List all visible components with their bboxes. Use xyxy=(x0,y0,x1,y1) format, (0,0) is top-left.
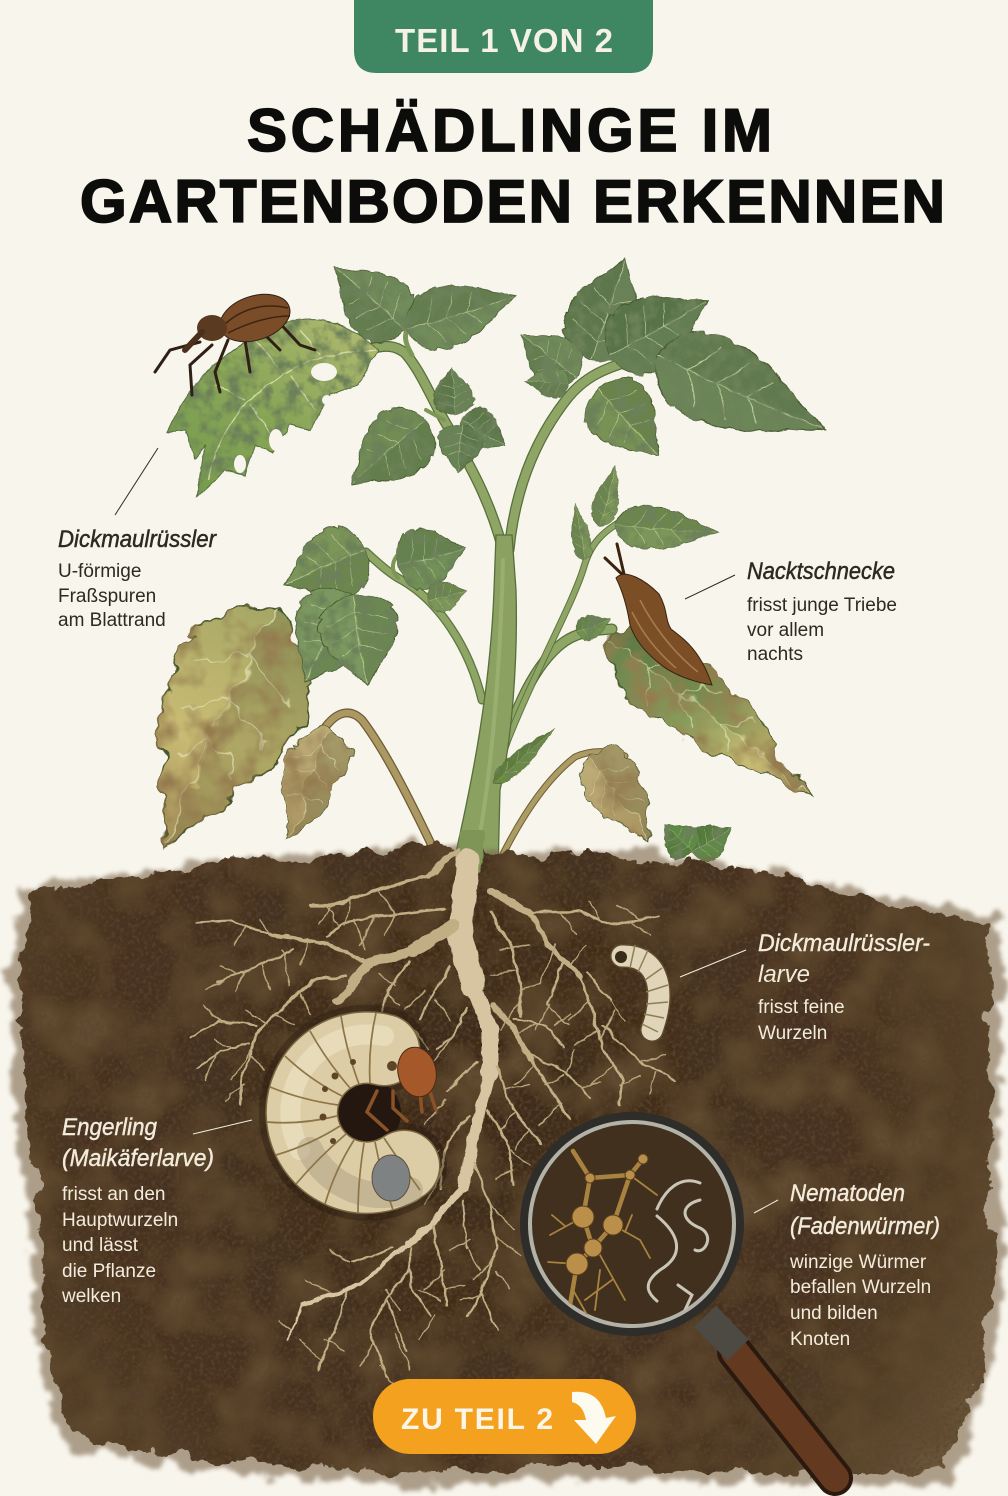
label: Dickmaulrüssler: Fraßspuren xyxy=(58,586,156,607)
icon: curved arrow xyxy=(572,1392,616,1444)
label: Dickmaulrüsslerlarve xyxy=(680,930,930,1044)
header tab xyxy=(354,0,653,73)
label: Nematoden: winzige Würmer xyxy=(789,1252,927,1273)
header tab: TEIL 1 VON 2 xyxy=(395,22,613,59)
label: Engerling: frisst an den xyxy=(62,1184,166,1205)
icon: weevil beetle xyxy=(155,286,315,395)
label: Engerling: und lässt xyxy=(62,1235,139,1256)
label: Nematoden: befallen Wurzeln xyxy=(790,1277,931,1298)
label: Engerling xyxy=(61,1114,252,1307)
label: Engerling: welken xyxy=(61,1286,121,1307)
feeding holes xyxy=(234,363,337,473)
leaves, middle xyxy=(268,462,741,868)
title: GARTENBODEN ERKENNEN xyxy=(80,168,945,235)
label: Dickmaulrüsslerlarve: Wurzeln xyxy=(758,1023,827,1044)
soil xyxy=(5,842,1006,1486)
title xyxy=(80,97,945,235)
wilted leaves xyxy=(103,584,836,878)
label: Nematoden: und bilden xyxy=(790,1303,878,1324)
label: Nematoden: Nematoden xyxy=(790,1180,905,1207)
icon: Engerling grub xyxy=(267,1013,441,1213)
label: Dickmaulrüssler: U-förmige xyxy=(58,561,141,582)
stems xyxy=(366,325,658,870)
label: Nacktschnecke: vor allem xyxy=(747,620,824,641)
icon: magnifying glass with nematodes xyxy=(526,1118,835,1478)
main taproot xyxy=(287,860,490,1341)
icon: slug xyxy=(605,544,712,685)
plant xyxy=(103,242,843,878)
button: Zu Teil 2 xyxy=(373,1379,636,1454)
label: Dickmaulrüssler: am Blattrand xyxy=(58,610,166,631)
dry bent stems xyxy=(320,713,625,858)
leaves, upper xyxy=(312,242,843,511)
primary lateral roots xyxy=(190,851,677,1376)
grub spiracles xyxy=(320,1059,397,1144)
label: Dickmaulrüsslerlarve: larve xyxy=(758,961,810,988)
label: Nematoden: Knoten xyxy=(790,1329,850,1350)
damaged leaf with feeding marks xyxy=(167,319,378,497)
grub segment lines xyxy=(267,1013,420,1213)
label: Dickmaulrüssler: Dickmaulrüssler xyxy=(58,526,217,553)
fine rootlets xyxy=(205,892,665,1385)
roots xyxy=(190,835,677,1385)
label: Dickmaulrüsslerlarve: frisst feine xyxy=(758,997,845,1018)
label: Dickmaulrüsslerlarve: Dickmaulrüssler- xyxy=(758,930,930,957)
label: Nacktschnecke: frisst junge Triebe xyxy=(747,595,897,616)
label: Engerling: Engerling xyxy=(62,1114,158,1141)
label: Nacktschnecke: nachts xyxy=(747,644,803,665)
button: Zu Teil 2: ZU TEIL 2 xyxy=(401,1403,553,1436)
icon: Dickmaulrüssler larva xyxy=(615,945,668,1032)
label: Nacktschnecke xyxy=(685,558,897,665)
label: Engerling: die Pflanze xyxy=(62,1261,156,1282)
label: Dickmaulrüssler xyxy=(58,448,217,631)
label: Nematoden xyxy=(754,1180,940,1350)
grub highlight band xyxy=(290,1034,384,1150)
label: Engerling: (Maikäferlarve) xyxy=(62,1145,214,1172)
label: Nacktschnecke: Nacktschnecke xyxy=(747,558,895,585)
label: Engerling: Hauptwurzeln xyxy=(62,1210,178,1231)
label: Nematoden: (Fadenwürmer) xyxy=(790,1213,940,1240)
stem base xyxy=(468,835,472,868)
title: SCHÄDLINGE IM xyxy=(247,97,772,164)
grub lower shading xyxy=(310,1150,410,1195)
